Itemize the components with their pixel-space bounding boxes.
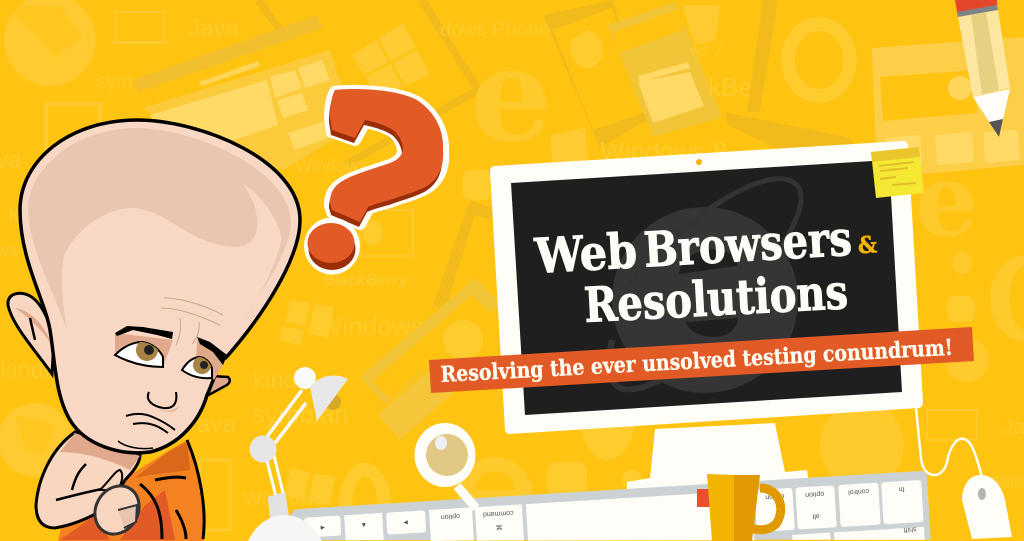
android	[462, 170, 492, 200]
magnifying glass	[414, 423, 476, 508]
background pattern of browser and device logos: BlackBerry	[323, 272, 409, 289]
robe	[58, 440, 205, 541]
title: Web Browsers and Resolutions: Browsers	[642, 211, 853, 279]
eyes	[115, 333, 226, 380]
keyboard: option	[765, 492, 785, 501]
monk character	[8, 120, 300, 541]
background pattern of browser and device logos: k	[8, 201, 21, 228]
keyboard: ⌘	[495, 523, 503, 531]
mouse cable	[916, 408, 982, 477]
coffee mug	[697, 474, 781, 541]
background pattern of browser and device logos: sym	[96, 71, 133, 93]
firefox lower-left	[0, 403, 72, 477]
hand	[86, 478, 148, 541]
laptop and opera logo	[747, 0, 778, 112]
keyboard: ▲	[360, 521, 367, 528]
background pattern of browser and device logos: kBe	[708, 72, 753, 102]
sticky note	[871, 147, 924, 198]
shoulder and arm	[36, 432, 140, 528]
keyboard: shift	[903, 525, 917, 533]
monitor stand	[627, 423, 810, 500]
opera outlines	[338, 462, 392, 541]
background pattern of browser and device logos: symbian	[252, 399, 349, 429]
background pattern of browser and device logos: dows Phone	[440, 19, 550, 41]
background pattern of browser and device logos: kindle	[253, 367, 316, 394]
mouse	[962, 475, 1012, 539]
eyebrows	[115, 326, 173, 339]
camera dot	[696, 159, 702, 165]
desk lamp	[250, 367, 348, 520]
keyboard	[292, 471, 931, 541]
screen	[511, 160, 902, 415]
right column logos: e	[915, 141, 979, 259]
question mark	[304, 89, 443, 275]
imac outline with apple	[360, 210, 413, 256]
mouth	[126, 414, 175, 433]
background pattern of browser and device logos: Windows	[318, 311, 423, 341]
firefox top-left	[4, 0, 96, 86]
keyboard: fn	[898, 485, 905, 492]
background pattern of browser and device logos: Windows	[295, 156, 368, 176]
question mark dot	[304, 218, 360, 274]
right browser window	[872, 37, 1024, 178]
keyboard: option	[441, 512, 460, 520]
keyboard: option	[805, 490, 824, 498]
background pattern of browser and device logos: kindle	[0, 357, 63, 384]
keyboard: ◄	[319, 523, 326, 531]
title: Web Browsers and Resolutions	[533, 209, 878, 334]
title: Web Browsers and Resolutions: &	[857, 231, 878, 259]
nose	[148, 392, 176, 408]
title: Web Browsers and Resolutions: Resolutions	[583, 264, 849, 334]
tablet frame with windows logo	[258, 0, 280, 30]
head	[20, 120, 300, 453]
tablet edge and browser window	[433, 200, 500, 310]
keyboard: alt	[812, 512, 820, 520]
left ear	[8, 293, 54, 374]
background pattern of browser and device logos: Windows 8	[600, 136, 727, 166]
finger	[100, 470, 122, 490]
keyboard: control	[847, 487, 869, 495]
right ear	[205, 376, 230, 397]
lamp base	[248, 515, 322, 541]
phone and tablets	[543, 0, 647, 148]
background pattern of browser and device logos: e	[470, 18, 553, 171]
title: Web Browsers and Resolutions: Web	[533, 223, 639, 285]
monitor	[490, 141, 924, 434]
internet explorer logo watermark	[609, 179, 801, 393]
background pattern of browser and device logos: ws 7	[689, 42, 723, 59]
background pattern of browser and device logos: ava	[197, 411, 236, 438]
keyboard: ►	[402, 518, 409, 526]
ribbon subtitle: Resolving the ever unsolved testing conundrum!	[440, 335, 954, 388]
forehead wrinkles	[161, 298, 223, 345]
browser window	[133, 15, 323, 92]
question mark hook	[329, 89, 443, 227]
pencil	[955, 0, 1010, 137]
background pattern of browser and device logos: Windows	[243, 488, 324, 510]
head shading	[28, 128, 291, 330]
background pattern of browser and device logos: Java	[188, 15, 239, 42]
keyboard: command	[483, 509, 514, 518]
